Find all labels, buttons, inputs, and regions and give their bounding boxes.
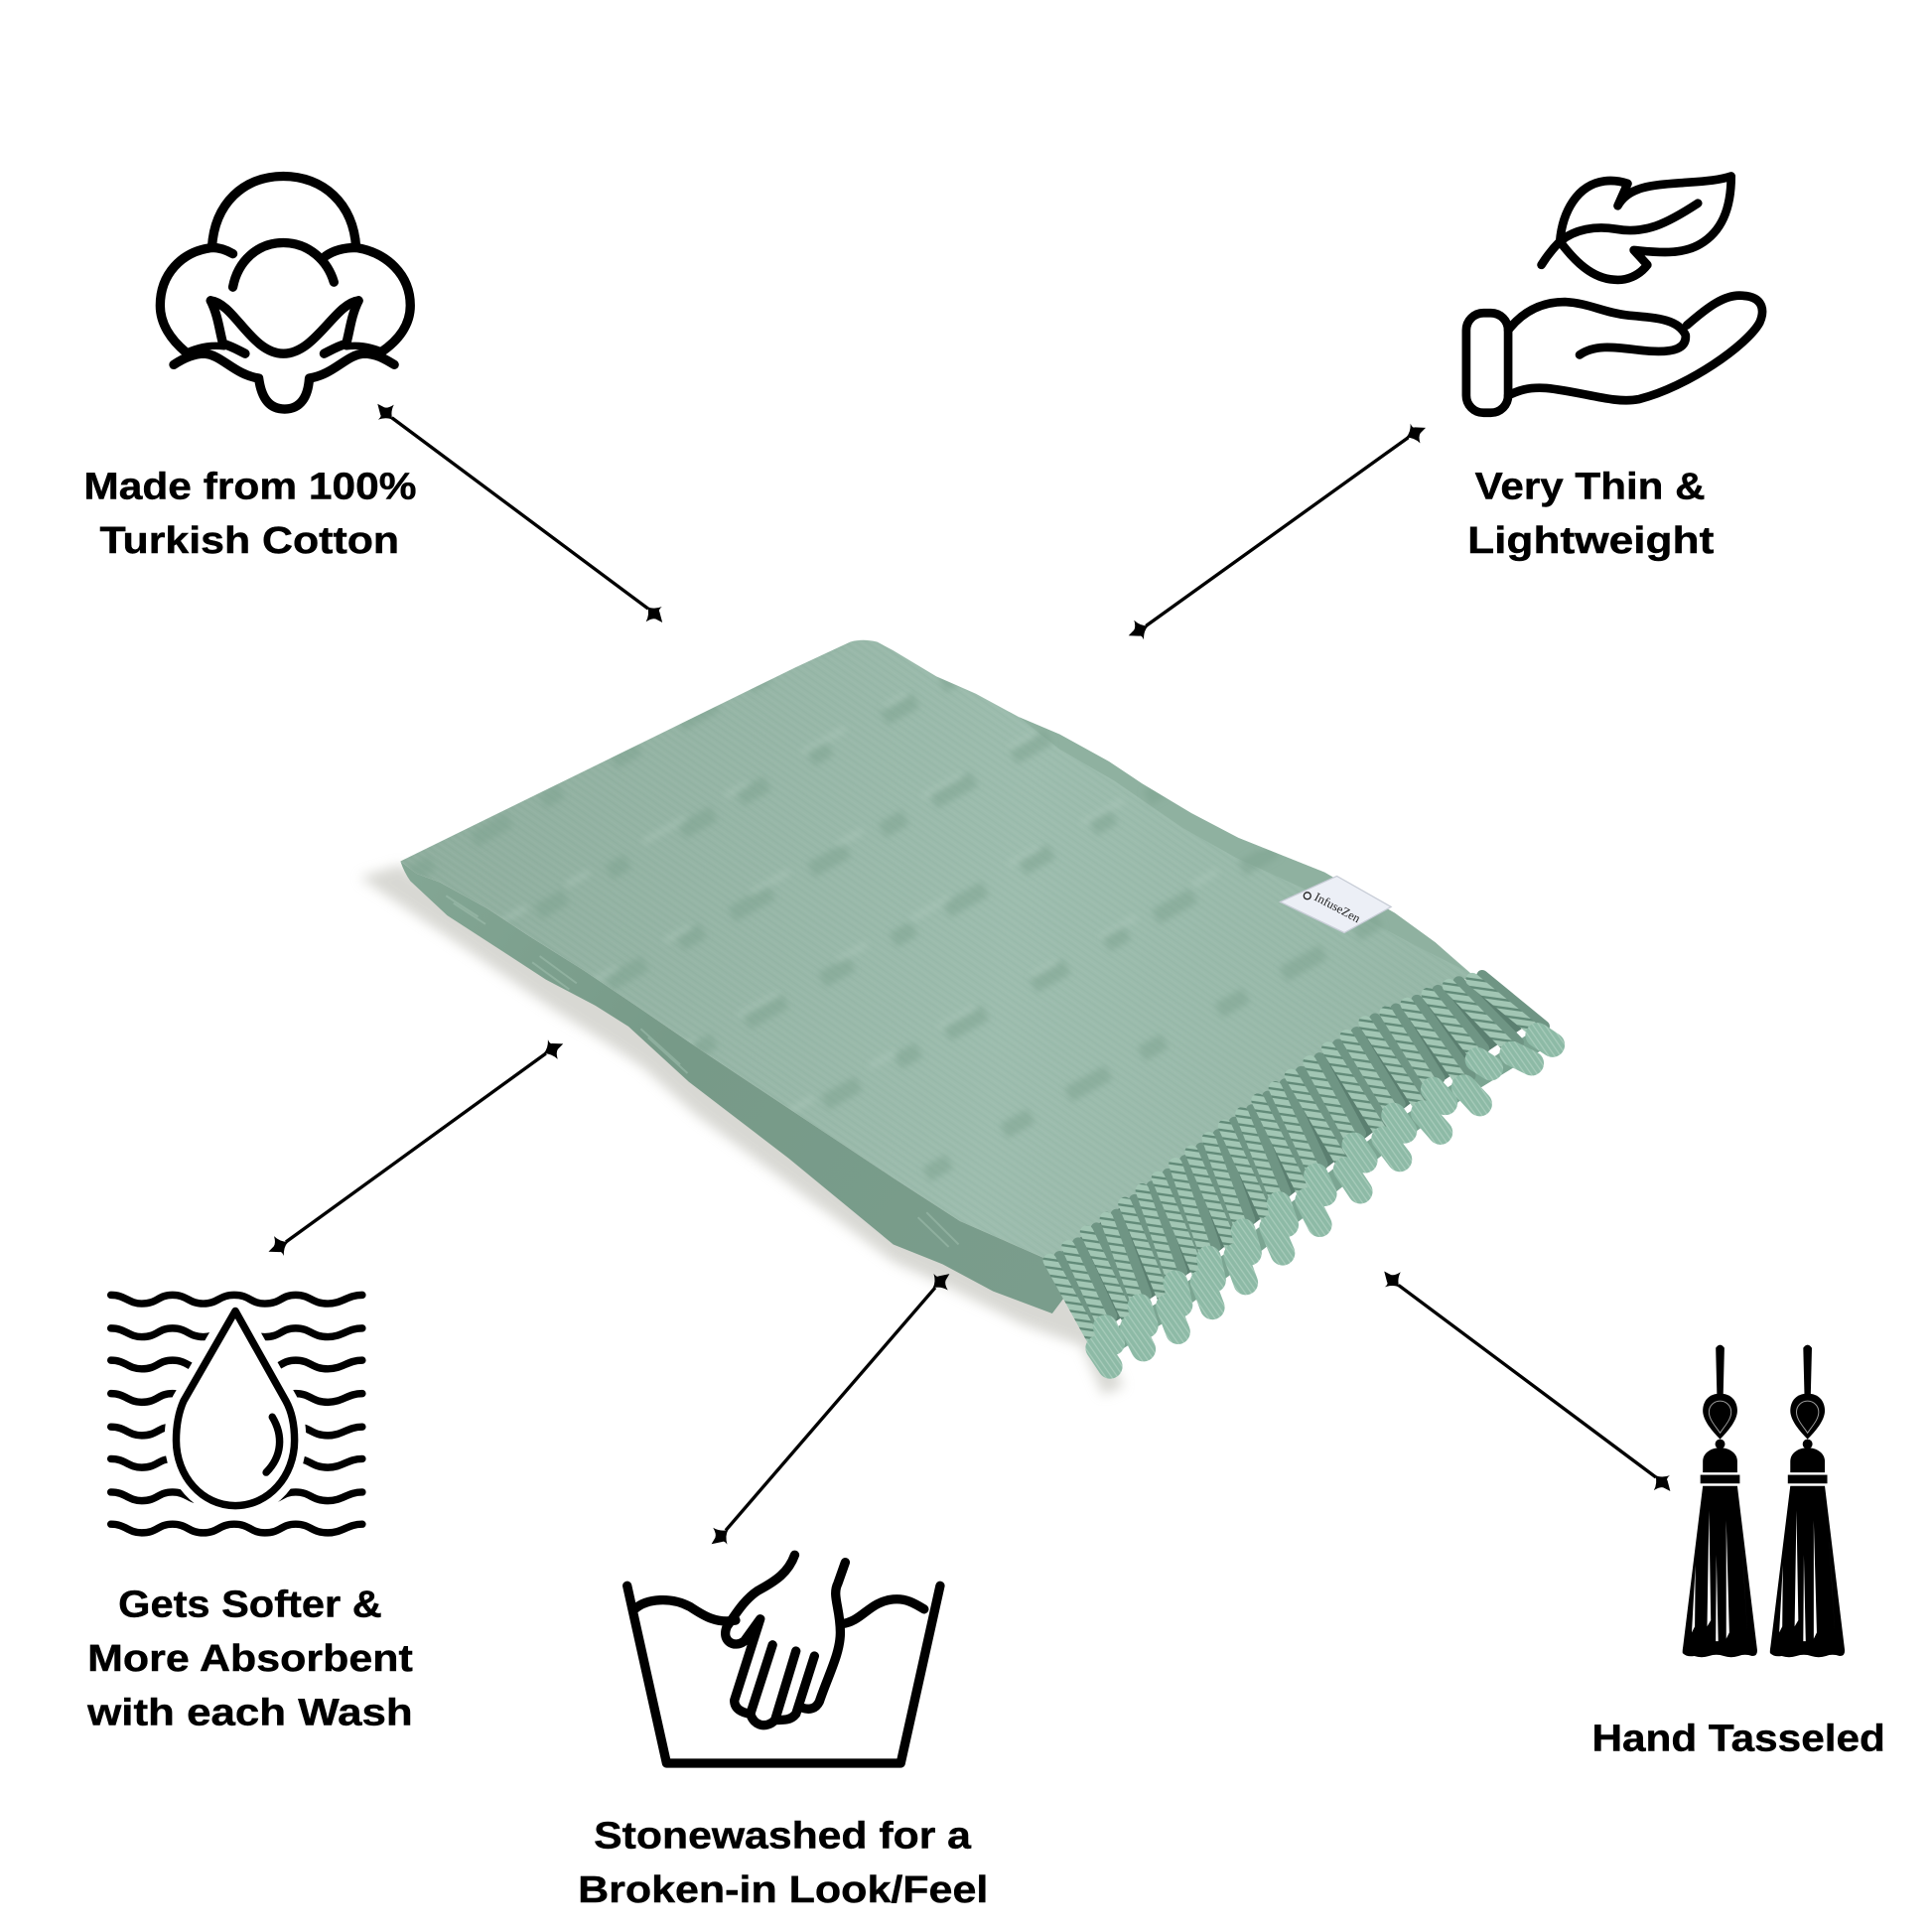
icon: hand washing basin: [627, 1555, 940, 1763]
drop knockout: [176, 1311, 295, 1506]
drop outline: [176, 1311, 295, 1506]
heading: made from 100% turkish cotton: [83, 467, 416, 562]
towel folded side: [400, 862, 1067, 1313]
feature: softer and more absorbent: [86, 1034, 569, 1733]
fringe mid-tone base: [1094, 1031, 1547, 1361]
heading: stonewashed for a broken-in look: [578, 1816, 988, 1911]
front row of ropes: [1049, 980, 1534, 1340]
icon: right tassel: [1770, 1345, 1845, 1657]
heading: made from 100% turkish cotton: Turkish Cotton: [100, 520, 399, 562]
icon: left tassel: [1683, 1345, 1757, 1657]
icon: water drop with waves: [111, 1295, 362, 1533]
heading: very thin and lightweight: Lightweight: [1467, 520, 1715, 562]
heading: very thin and lightweight: Very Thin &: [1475, 467, 1706, 508]
fringe tassel tips: [1098, 1035, 1553, 1366]
arrow: tassel to towel: [1377, 1264, 1678, 1498]
towel hem strip: [1019, 717, 1466, 971]
top and bottom waves: [111, 1295, 362, 1533]
heading: stonewashed for a broken-in look: Broken-in Look/Feel: [578, 1869, 988, 1911]
towel label: InfuseZen: [1312, 890, 1363, 926]
towel photo: [361, 639, 1565, 1398]
feature: turkish cotton: [83, 176, 670, 629]
heading: stonewashed for a broken-in look: Stonewashed for a: [594, 1816, 972, 1858]
lighter slub highlights: [504, 701, 897, 1012]
waves behind drop: [111, 1328, 362, 1501]
arrow: lightweight to towel: [1123, 418, 1431, 645]
arrow: absorbent to towel: [263, 1034, 569, 1262]
feature: hand tasseled: [1377, 1264, 1885, 1760]
feature: thin and lightweight: [1123, 176, 1762, 645]
towel top surface: [400, 640, 1473, 1261]
heading: gets softer and more absorbent: with each Wash: [86, 1692, 413, 1733]
fringe backing: [1049, 980, 1522, 1335]
back row of ropes: [1059, 976, 1544, 1337]
heading: very thin and lightweight: [1467, 467, 1715, 562]
arrow: cotton to towel: [370, 396, 670, 629]
heading: made from 100% turkish cotton: Made from 100%: [83, 467, 416, 508]
towel shadow: [359, 865, 1124, 1395]
towel label: [1280, 876, 1391, 932]
heading: gets softer and more absorbent: More Absorbent: [87, 1638, 413, 1680]
heading: gets softer and more absorbent: [86, 1584, 413, 1733]
towel side ridges: [446, 896, 959, 1247]
icon: hand and leaf: [1466, 176, 1762, 413]
fringe ropes: [1049, 976, 1544, 1340]
heading: gets softer and more absorbent: Gets Softer &: [118, 1584, 382, 1625]
arrow: stonewashed to towel: [704, 1266, 957, 1552]
icon: cotton boll: [160, 176, 410, 409]
feature: stonewashed: [578, 1266, 988, 1911]
towel weave texture: [400, 640, 1473, 1261]
heading: hand tasseled: Hand Tasseled: [1591, 1719, 1885, 1760]
slub stripes: [410, 678, 1380, 1179]
